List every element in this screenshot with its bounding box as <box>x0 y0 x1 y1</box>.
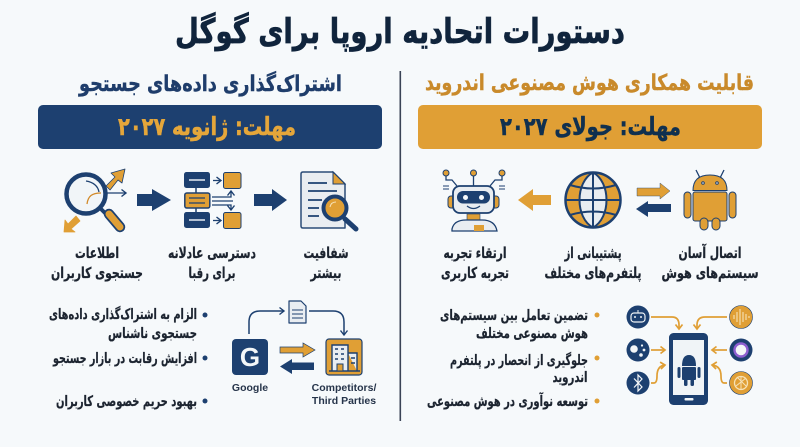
label: easy connection: اتصال آسان <box>678 244 742 262</box>
label: multi-platform support: پلتفرم‌های مختلف <box>544 264 642 283</box>
arrow: to android <box>637 183 670 199</box>
label: fair access: برای رقبا <box>188 264 236 282</box>
label: search data <box>51 244 143 282</box>
left bullet list: الزام به اشتراک‌گذاری داده‌های <box>49 305 197 323</box>
divider <box>400 71 401 421</box>
left bullet list: افزایش رقابت در بازار جستجو <box>52 351 197 367</box>
left heading: اشتراک‌گذاری داده‌های جستجو <box>78 70 342 97</box>
right bullet list: توسعه نوآوری در هوش مصنوعی <box>427 392 588 410</box>
left deadline band <box>38 105 382 149</box>
label: competitors: Competitors/ <box>312 382 376 394</box>
arrow: magnifier to flow <box>137 189 171 211</box>
icon: Google <box>232 339 268 375</box>
connectors to phone <box>651 317 727 383</box>
icon: voice wave <box>730 306 752 328</box>
right bullet list <box>427 308 600 410</box>
arrow: to robot <box>518 189 551 211</box>
right bullet list: تضمین تعامل بین سیستم‌های <box>440 308 588 324</box>
data-sharing diagram <box>232 301 376 407</box>
arrow: to globe <box>636 201 671 217</box>
label: transparency <box>304 244 348 282</box>
right bullet list: جلوگیری از انحصار در پلتفرم <box>450 351 588 369</box>
icon: AI bot <box>626 306 650 328</box>
icon: magnifier with arrows <box>64 169 126 232</box>
icon: ring assistant <box>730 338 752 362</box>
panel: data sharing (left) <box>38 70 382 410</box>
label: search data: جستجوی کاربران <box>51 264 143 282</box>
icon: flow diagram <box>184 172 241 228</box>
connector: Google to document <box>249 311 284 334</box>
label: multi-platform support <box>544 244 642 283</box>
label: user experience: تجربه کاربری <box>441 264 509 282</box>
label: multi-platform support: پشتیبانی از <box>564 244 622 263</box>
left deadline band: مهلت: ژانویه ۲۰۲۷ <box>118 112 296 142</box>
arrow: to Google <box>280 359 314 374</box>
label: user experience <box>441 244 509 282</box>
label: competitors <box>312 382 376 407</box>
label: easy connection <box>662 244 758 282</box>
left bullet list: بهبود حریم خصوصی کاربران <box>56 394 197 410</box>
left bullet list <box>49 305 208 410</box>
AI ecosystem diagram <box>626 306 752 405</box>
panel: AI interoperability (right) <box>418 71 762 410</box>
right deadline band <box>418 105 762 149</box>
label: fair access: دسترسی عادلانه <box>168 244 256 262</box>
icon: globe <box>566 172 620 228</box>
right bullet list: اندروید <box>552 370 588 386</box>
label: fair access <box>168 244 256 282</box>
arrow: flow to document <box>254 189 287 211</box>
right bullet list: هوش مصنوعی مختلف <box>476 326 588 342</box>
icon: bluetooth <box>626 372 650 394</box>
icon: document <box>289 301 306 323</box>
arrow: to competitors <box>280 343 315 357</box>
icon: assistant <box>626 338 650 362</box>
icon: competitors building <box>326 339 362 375</box>
label: search data: اطلاعات <box>75 244 119 262</box>
title: دستورات اتحادیه اروپا برای گوگل <box>175 12 625 52</box>
connector: document to competitors <box>309 311 344 335</box>
label: transparency: بیشتر <box>310 264 342 282</box>
icon: phone with android <box>669 333 708 405</box>
label: competitors: Third Parties <box>312 395 376 407</box>
icon: robot <box>443 170 505 231</box>
label: Google: Google <box>232 382 268 394</box>
icon: document with magnifier <box>301 172 356 229</box>
icon: knot assistant <box>730 372 752 394</box>
label: transparency: شفافیت <box>304 244 348 262</box>
icon: Google: G <box>240 342 260 372</box>
label: user experience: ارتقاء تجربه <box>444 244 506 262</box>
right deadline band: مهلت: جولای ۲۰۲۷ <box>500 112 681 142</box>
icon: android <box>684 170 736 230</box>
label: easy connection: سیستم‌های هوش <box>662 264 758 282</box>
left bullet list: جستجوی ناشناس <box>108 326 197 342</box>
